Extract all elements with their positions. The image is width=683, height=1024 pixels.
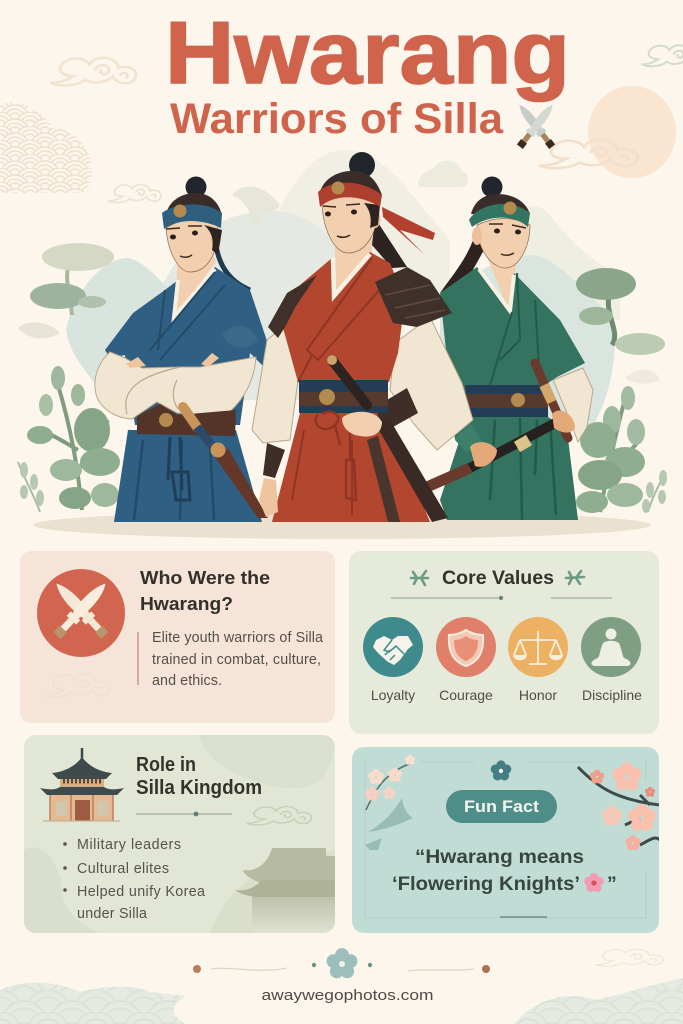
red warrior right sleeve (390, 317, 473, 450)
panel: fun fact (352, 747, 660, 933)
red warrior head (318, 152, 382, 253)
red warrior long hair (372, 218, 407, 268)
value: courage: Courage (439, 687, 493, 703)
red warrior knot and tassel (316, 412, 356, 500)
quote text: “Hwarang means (415, 846, 584, 868)
footer credit: awaywegophotos.com (262, 987, 434, 1004)
sprig right (566, 571, 584, 584)
wave hill bottom right (514, 978, 683, 1024)
divider (136, 813, 232, 815)
green warrior head (469, 176, 530, 268)
cloud in panel (246, 807, 311, 825)
value: honor (508, 617, 568, 703)
bullet list: Military leaders (77, 837, 181, 853)
blue warrior skirt (114, 430, 262, 522)
panel description: and ethics. (152, 673, 222, 689)
panel heading: Role in (136, 754, 196, 776)
footer ornament (193, 948, 490, 978)
cloud top left (50, 58, 136, 85)
green warrior robe (440, 267, 585, 440)
bullet list: under Silla (77, 906, 147, 922)
bullet list: Cultural elites (77, 861, 169, 877)
leafy plant left (18, 366, 120, 512)
red warrior armor left (268, 275, 317, 338)
green warrior belt (465, 385, 548, 417)
blue warrior neck (174, 250, 216, 318)
leafy plant right (576, 386, 667, 513)
red warrior sword (327, 355, 448, 522)
green warrior neck (484, 250, 518, 313)
quote text: ‘Flowering Knights’ (392, 873, 580, 895)
faint cloud in panel (45, 674, 109, 697)
value: discipline (581, 617, 642, 703)
value: loyalty (363, 617, 423, 703)
red warrior wrist guards (263, 388, 418, 478)
panel: role in silla kingdom (24, 735, 335, 933)
wave pattern hill top left (0, 103, 92, 193)
green warrior cuff (455, 423, 483, 453)
value: courage (436, 617, 496, 703)
icon: crossed swords beside subtitle (516, 102, 556, 150)
blue warrior sword (183, 407, 268, 518)
icon: pagoda (40, 748, 124, 821)
top flower icon (491, 760, 511, 780)
green warrior skirt (440, 417, 578, 520)
green warrior right sleeve (553, 368, 593, 442)
background mountains (66, 150, 620, 430)
bullet list: Helped unify Korea (77, 884, 205, 900)
green warrior hands (470, 411, 575, 467)
panel heading: Hwarang? (140, 593, 233, 614)
red warrior armor right (375, 267, 452, 327)
value: honor: Honor (519, 687, 557, 703)
blue warrior head (162, 176, 222, 272)
blue warrior tassel (168, 437, 190, 500)
panel: who were the hwarang (20, 551, 335, 723)
green warrior long hair (440, 228, 484, 293)
red warrior hand (342, 412, 382, 437)
cloud by sun (539, 140, 638, 168)
panel description: trained in combat, culture, (152, 652, 321, 668)
panel: core values (349, 551, 659, 734)
inner border (365, 760, 646, 918)
green warrior swords (427, 363, 568, 487)
blossoms left (365, 755, 415, 850)
red warrior skirt (272, 413, 430, 522)
value: loyalty: Loyalty (371, 687, 415, 703)
panel heading: Silla Kingdom (136, 777, 262, 799)
blossoms right (578, 762, 660, 850)
red warrior torso (283, 252, 405, 382)
quote text: ” (607, 873, 617, 895)
blue warrior robe (105, 267, 270, 425)
red warrior left sleeve (252, 327, 298, 443)
blue warrior crossed sleeves (95, 352, 256, 419)
fun fact pill (446, 790, 557, 823)
red warrior left hand (259, 478, 278, 517)
blue warrior hair ribbon (215, 240, 250, 290)
figure: green warrior (427, 176, 593, 520)
figure: blue warrior (95, 176, 270, 522)
accent rule (137, 632, 139, 685)
blue warrior belt (137, 404, 236, 436)
value: discipline: Discipline (582, 687, 642, 703)
footer cloud (595, 949, 663, 966)
decorative sun (588, 86, 676, 178)
blue warrior hands (126, 353, 219, 368)
divider (391, 597, 612, 599)
panel heading: Who Were the (140, 567, 270, 588)
red warrior neck (335, 235, 372, 298)
red warrior headband tails (382, 207, 435, 255)
title: Hwarang (165, 3, 570, 102)
red warrior belt (299, 380, 388, 413)
bullet list (63, 837, 205, 922)
ground (33, 511, 651, 539)
panel background shapes (24, 735, 335, 933)
wave hill bottom left (0, 983, 186, 1024)
fun fact label: Fun Fact (464, 797, 539, 816)
faint clouds behind figures (18, 161, 660, 384)
icon: pink flower emoji (584, 873, 604, 892)
heading: core values: Core Values (442, 567, 554, 589)
icon: crossed swords in red circle (37, 569, 125, 657)
subtitle: Warriors of Silla (170, 95, 504, 143)
bonsai tree right (576, 268, 665, 355)
cloud top right (641, 45, 683, 66)
bonsai tree left (30, 243, 114, 315)
panel description: Elite youth warriors of Silla (152, 630, 323, 646)
short rule (500, 916, 547, 918)
figure: red warrior (252, 152, 473, 522)
sprig left (411, 571, 428, 585)
ghost pagoda (235, 848, 335, 920)
